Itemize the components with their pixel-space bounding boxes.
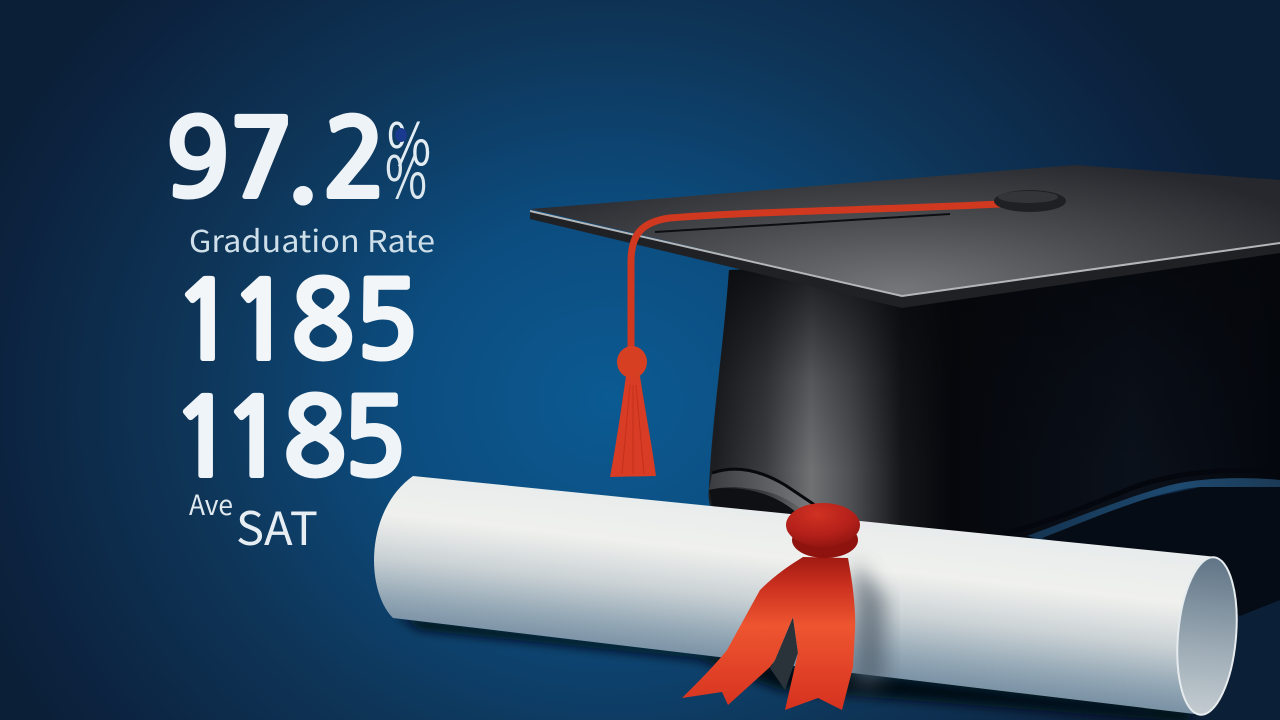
label: average SAT [189,484,318,559]
scroll end [1171,555,1243,717]
knot upper [786,503,860,547]
button [994,190,1066,212]
cap lower shadow region [1000,470,1280,616]
knot lower [792,522,858,558]
label: Graduation Rate [189,217,435,261]
ribbon [682,557,855,710]
Ave: Ave [189,484,233,524]
ribbon gap shadow [770,617,798,690]
cap body top shade [712,245,1280,470]
stat: second 1185: 1185 [170,386,407,493]
mortarboard [530,165,1280,296]
ribbon shadow [855,560,885,690]
value: 97.2 [165,107,387,214]
cap band left [709,488,800,516]
knot [786,503,860,558]
graduation cap [530,165,1280,616]
cord [631,204,1000,350]
stat: graduation rate [165,98,435,261]
SAT: SAT [236,493,318,559]
diploma [374,476,1243,720]
tassel [610,190,1066,477]
mortarboard edge [530,211,1280,308]
cap body [709,245,1280,540]
cap band right [1027,478,1280,539]
lower percent sign: % [385,131,427,215]
upper percent sign: % [387,98,431,182]
percent dot [395,128,407,142]
stat: first 1185: 1185 [172,269,419,376]
tassel ball [617,346,647,378]
shadow [395,616,1190,720]
cord shadow [655,214,950,232]
scroll [374,476,1217,715]
tassel fringe [610,376,656,477]
